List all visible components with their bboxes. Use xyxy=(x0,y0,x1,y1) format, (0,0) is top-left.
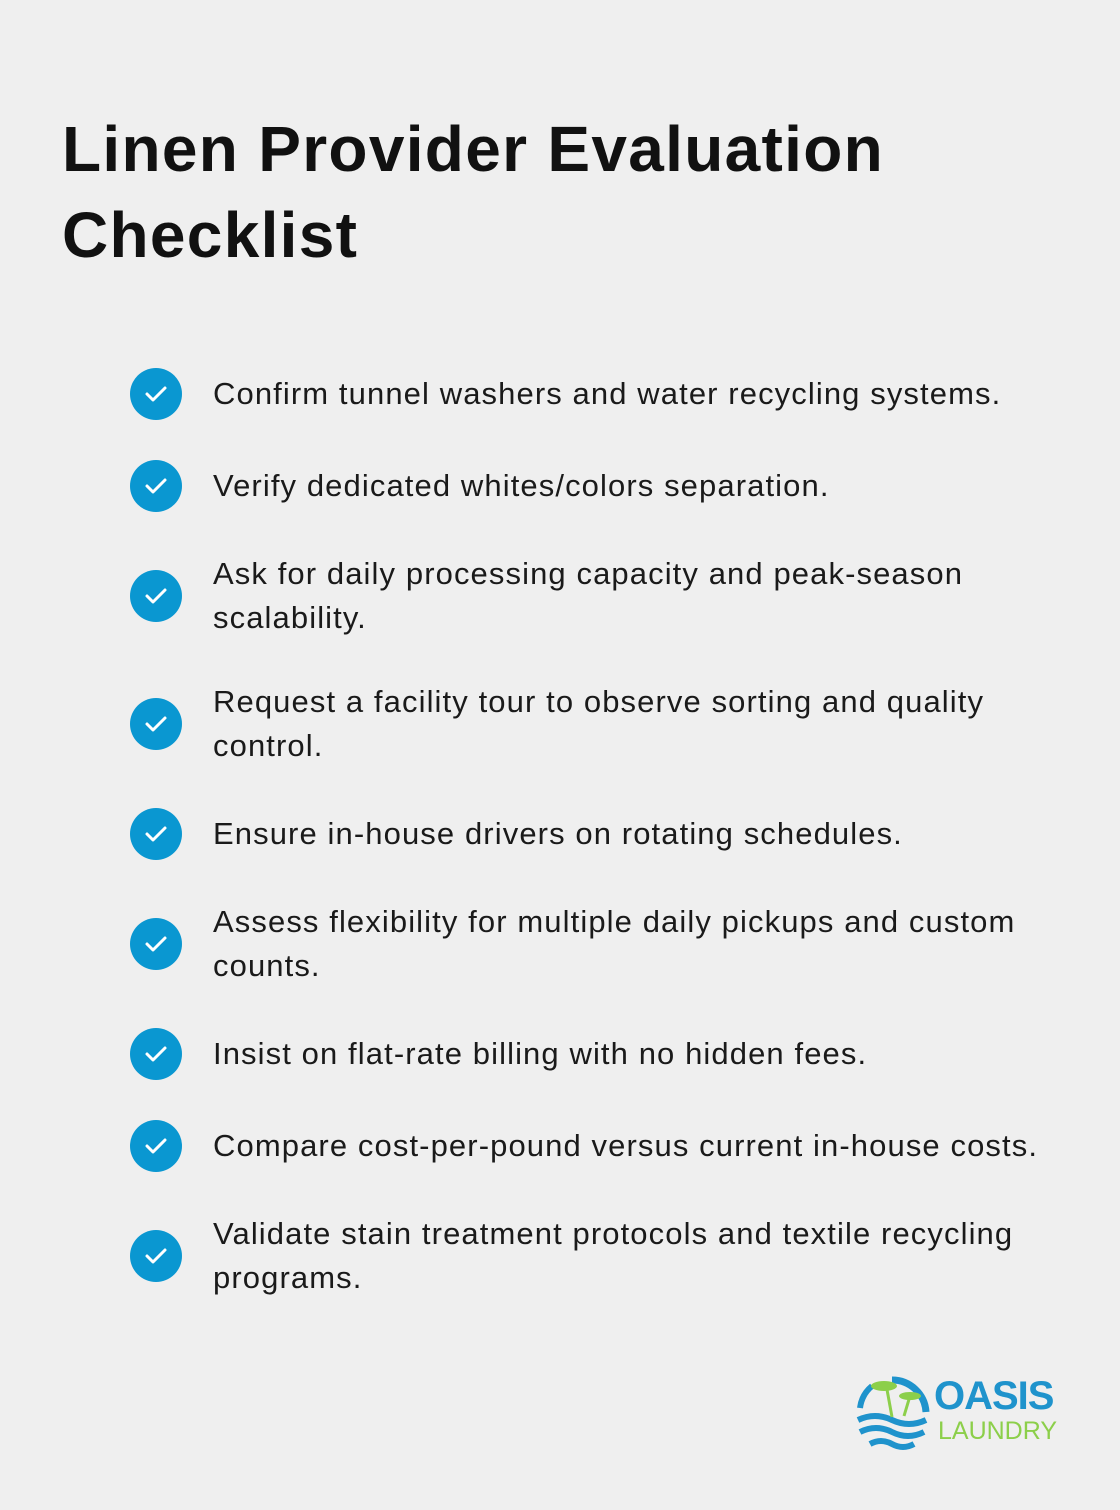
title: Checklist xyxy=(62,199,358,271)
item 9: programs. xyxy=(213,1260,362,1295)
item 6 xyxy=(130,904,1015,983)
item 3: Ask for daily processing capacity and peak-season xyxy=(213,556,963,591)
checklist xyxy=(130,368,1038,1295)
item 4: control. xyxy=(213,728,323,763)
item 1: Confirm tunnel washers and water recycling systems. xyxy=(213,376,1001,411)
item 2: Verify dedicated whites/colors separation. xyxy=(213,468,830,503)
item 2 xyxy=(130,460,830,512)
title: Linen Provider Evaluation xyxy=(62,113,884,185)
item 9 xyxy=(130,1216,1013,1295)
item 6: Assess flexibility for multiple daily pickups and custom xyxy=(213,904,1015,939)
item 7: Insist on flat-rate billing with no hidden fees. xyxy=(213,1036,867,1071)
item 5 xyxy=(130,808,903,860)
item 8: Compare cost-per-pound versus current in-house costs. xyxy=(213,1128,1038,1163)
item 4: Request a facility tour to observe sorting and quality xyxy=(213,684,984,719)
logo: LAUNDRY xyxy=(938,1417,1057,1445)
item 5: Ensure in-house drivers on rotating schedules. xyxy=(213,816,903,851)
item 3 xyxy=(130,556,963,635)
item 3: scalability. xyxy=(213,600,367,635)
item 7 xyxy=(130,1028,867,1080)
item 4 xyxy=(130,684,984,763)
item 9: Validate stain treatment protocols and textile recycling xyxy=(213,1216,1013,1251)
item 1 xyxy=(130,368,1001,420)
item 6: counts. xyxy=(213,948,321,983)
logo xyxy=(856,1374,1057,1450)
icon: palm sun waves xyxy=(856,1376,930,1450)
item 8 xyxy=(130,1120,1038,1172)
logo text: OASIS xyxy=(934,1374,1053,1418)
title xyxy=(62,113,884,271)
